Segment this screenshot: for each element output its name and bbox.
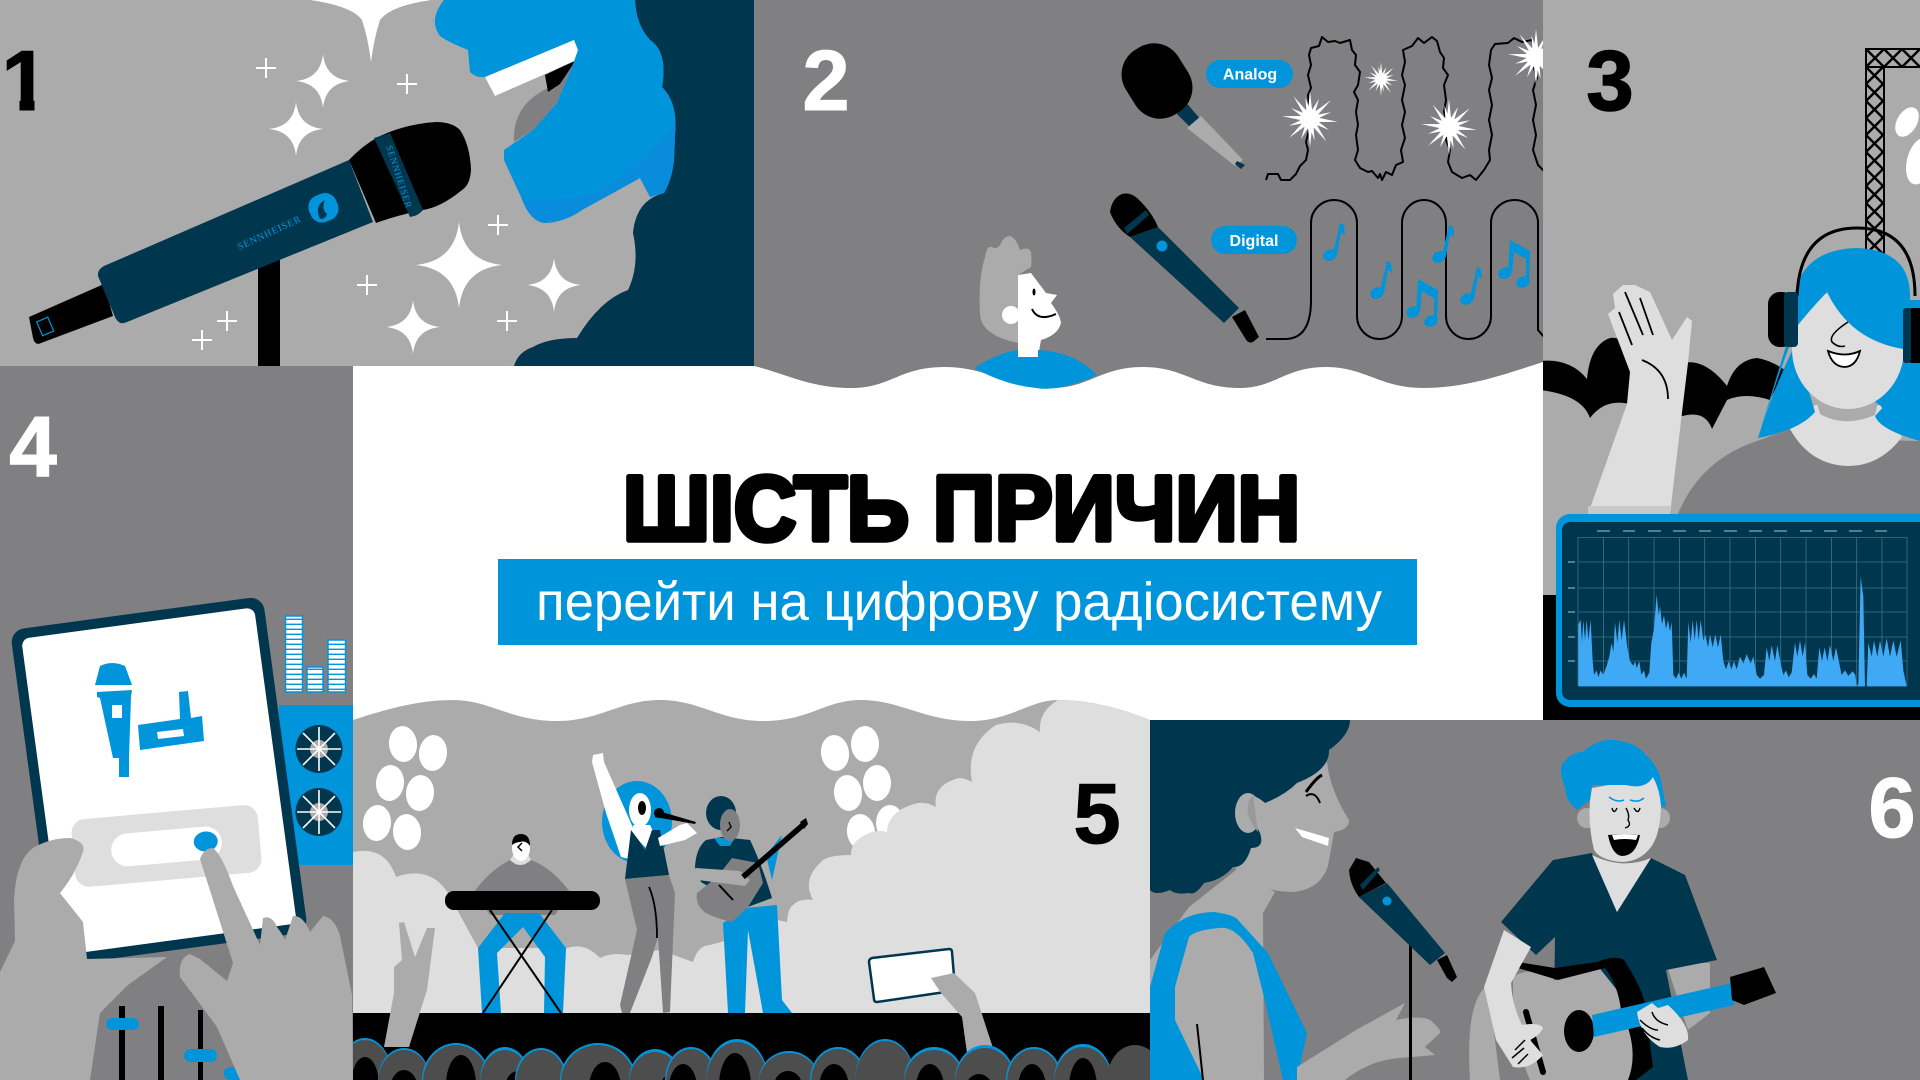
number 5: 5	[1073, 767, 1121, 862]
stage microphone	[1349, 858, 1457, 982]
music notes	[1321, 223, 1532, 329]
digital label	[1211, 226, 1297, 254]
analog wave line	[1266, 37, 1545, 180]
guitarist facial features	[1608, 797, 1644, 856]
digital label: Digital	[1230, 233, 1278, 250]
noise bursts	[1282, 29, 1564, 155]
listener shirt	[974, 350, 1097, 389]
guitarist face	[1590, 777, 1661, 862]
level meters	[286, 616, 346, 692]
guitarist body	[1469, 853, 1717, 1080]
raised hand	[1588, 285, 1692, 514]
smoke clouds	[353, 700, 1150, 1013]
digital wave line	[1266, 200, 1545, 339]
right hand	[180, 848, 353, 1080]
analog label: Analog	[1223, 66, 1277, 84]
guitar	[1513, 958, 1776, 1080]
phone in hand	[869, 949, 993, 1053]
woman face	[1225, 762, 1349, 892]
number 4: 4	[9, 400, 57, 495]
woman dress	[1150, 912, 1307, 1080]
toggle switch	[70, 804, 263, 888]
woman neck and shoulders	[1150, 870, 1275, 1080]
guitarist hair	[1561, 740, 1666, 810]
listener face	[1002, 273, 1061, 357]
number 2: 2	[802, 34, 850, 129]
analog microphone	[1122, 43, 1245, 169]
stage floor	[353, 1013, 1150, 1080]
number 3: 3	[1586, 34, 1634, 129]
sparkles and plus signs	[192, 54, 581, 354]
monitor grid	[1578, 537, 1907, 686]
raised peace hand	[384, 922, 435, 1047]
digital microphone	[1110, 194, 1259, 342]
listener hair	[980, 236, 1032, 343]
right lights	[819, 726, 904, 852]
singer face	[435, 0, 676, 223]
monitor ticks	[1568, 531, 1887, 661]
teeth	[485, 40, 578, 96]
mixer faders	[90, 957, 254, 1080]
receiver icon on tablet	[138, 691, 204, 750]
navy background shape	[514, 0, 754, 366]
microphone stand	[1409, 940, 1412, 1080]
left hand	[0, 838, 167, 1080]
keyboard player	[445, 834, 600, 1013]
brand text on ring: SENNHEISER	[383, 144, 413, 210]
jaw shading	[521, 125, 675, 223]
engineer body	[1678, 429, 1920, 514]
handheld microphone	[29, 122, 471, 344]
woman ear	[1235, 793, 1261, 833]
face	[1792, 289, 1904, 409]
singer on stage	[592, 753, 697, 1013]
woman teeth	[1295, 828, 1329, 846]
hair back	[1758, 300, 1920, 441]
number 6: 6	[1868, 761, 1916, 856]
fringe	[1793, 248, 1910, 349]
guitarist on stage	[695, 796, 808, 1013]
woman eye and brow	[1306, 775, 1322, 803]
panel 1: singer and microphone	[0, 0, 754, 366]
spectrum monitor	[1556, 514, 1920, 707]
spotlights	[1895, 107, 1920, 184]
microphone icon on tablet	[95, 663, 132, 777]
panel 4: tablet control	[0, 366, 353, 1080]
panel 2: analog versus digital	[754, 0, 1564, 389]
audience heads	[337, 1038, 1163, 1080]
analog label	[1206, 60, 1293, 88]
guitarist arm and hands	[1484, 930, 1688, 1068]
woman hand	[1297, 1003, 1440, 1080]
stage truss	[1866, 49, 1920, 257]
mouth interior	[545, 60, 576, 92]
neck	[1790, 405, 1902, 466]
hair side	[1758, 345, 1920, 441]
panel 5: band on stage	[337, 700, 1163, 1080]
subtitle banner	[498, 559, 1417, 645]
waveform	[1578, 576, 1907, 686]
panel 6: singer and guitarist	[1150, 720, 1920, 1080]
singer tongue	[514, 62, 574, 142]
crowd silhouette wings	[1540, 338, 1785, 429]
woman hair	[1150, 720, 1350, 894]
mic stand	[258, 260, 280, 366]
title: ШІСТЬ ПРИЧИН	[623, 458, 1300, 560]
panel 3: engineer and spectrum monitor	[1540, 0, 1920, 720]
headphones	[1768, 228, 1920, 363]
nose and smile	[1828, 322, 1860, 367]
left lights	[361, 725, 449, 851]
guitarist ears	[1577, 808, 1670, 828]
subtitle text: перейти на цифрову радіосистему	[536, 572, 1382, 632]
tablet	[10, 596, 308, 966]
big sparkle at top	[310, 0, 431, 62]
brand text on handle: SENNHEISER	[236, 214, 303, 253]
number 1: 1	[1, 34, 49, 129]
speaker rack	[279, 705, 353, 865]
